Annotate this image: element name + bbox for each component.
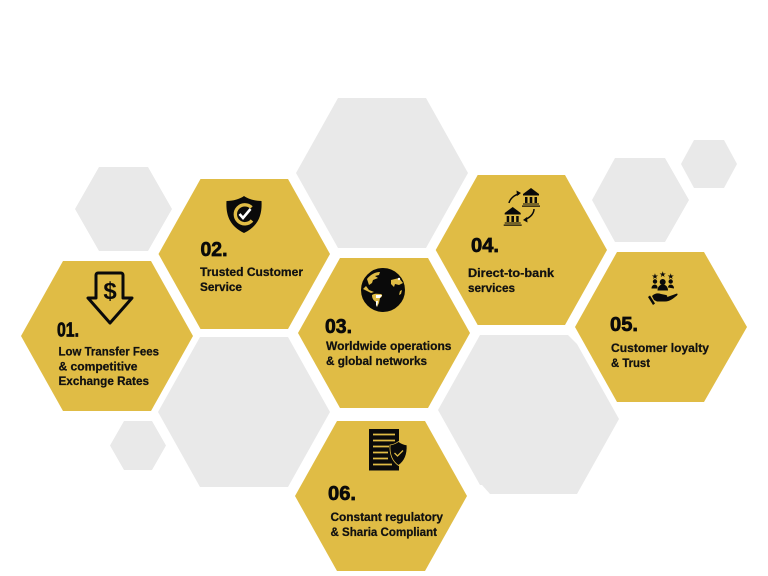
text: trusted customer service: Service — [200, 280, 242, 294]
number 06: 06. — [328, 483, 356, 505]
text: direct-to-bank services: services — [468, 281, 515, 295]
text: low transfer fees: Low Transfer Fees — [58, 344, 159, 358]
text: trusted customer service — [200, 265, 303, 294]
icon: people, stars and hand: ★ — [651, 272, 659, 281]
panel: 04 direct-to-bank — [436, 175, 607, 325]
panel: 05 customer loyalty — [575, 252, 747, 402]
icon: shield check — [226, 196, 262, 233]
background hexagons — [75, 98, 737, 494]
text: direct-to-bank services: Direct-to-bank — [468, 266, 554, 280]
panel: 06 regulatory and sharia — [295, 421, 467, 571]
text: worldwide operations: Worldwide operations — [326, 339, 452, 353]
icon: banks and arrows — [504, 188, 540, 226]
number 05: 05. — [610, 314, 638, 336]
number 01: 01. — [57, 320, 79, 342]
text: low transfer fees: Exchange Rates — [58, 374, 149, 388]
text: customer loyalty and trust — [611, 341, 709, 370]
text: worldwide operations: & global networks — [326, 354, 427, 368]
number 04: 04. — [471, 235, 499, 257]
text: direct-to-bank services — [468, 266, 554, 295]
panel: 01 low transfer fees — [21, 261, 193, 411]
icon: document with shield — [369, 429, 407, 470]
number 03: 03. — [325, 316, 352, 338]
text: constant regulatory: & Sharia Compliant — [330, 525, 437, 539]
icon: dollar down arrow — [88, 273, 132, 323]
icon: dollar down arrow: $ — [103, 278, 117, 305]
text: worldwide operations — [326, 339, 452, 368]
text: constant regulatory — [330, 510, 443, 539]
text: trusted customer service: Trusted Customer — [200, 265, 303, 279]
text: low transfer fees: & competitive — [58, 360, 138, 374]
panel: 03 worldwide operations — [298, 258, 470, 408]
icon: people, stars and hand: ★ — [659, 270, 666, 279]
icon: people, stars and hand: ★ — [667, 272, 674, 281]
icon: people, stars and hand — [648, 270, 678, 305]
text: low transfer fees — [58, 344, 159, 388]
text: customer loyalty and trust: Customer loyalty — [611, 341, 709, 355]
text: customer loyalty and trust: & Trust — [611, 356, 650, 370]
panel: 02 trusted customer service — [158, 179, 330, 329]
number 02: 02. — [200, 239, 228, 261]
text: constant regulatory: Constant regulatory — [330, 510, 443, 524]
icon: globe — [362, 268, 404, 312]
